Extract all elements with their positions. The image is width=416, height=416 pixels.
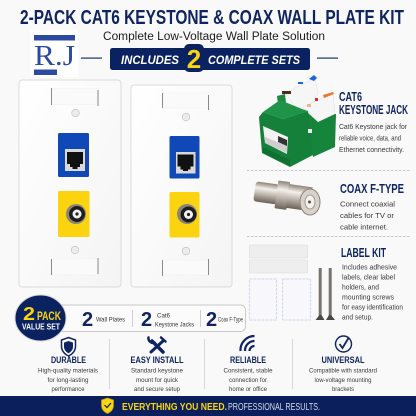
text: cat6 keystone jack: Ethernet connectivity. bbox=[339, 145, 404, 154]
text: coax f-type bbox=[340, 182, 404, 232]
feature: durable bbox=[38, 338, 99, 393]
yellow coax port bbox=[58, 191, 90, 237]
icon: wrench and screwdriver bbox=[148, 338, 166, 352]
footer band: EVERYTHING YOU NEED. bbox=[122, 401, 227, 413]
text: label kit: for easy identification bbox=[342, 302, 403, 312]
text: label kit: labels, clear label bbox=[342, 272, 395, 282]
yellow coax port bbox=[170, 192, 200, 238]
icon: signal arcs bbox=[240, 336, 254, 351]
value set strip: Cat6 bbox=[157, 312, 170, 320]
wall plate 1 bbox=[19, 80, 121, 287]
text: cat6 keystone jack: Cat6 Keystone jack for bbox=[339, 122, 407, 131]
feature: easy install: EASY INSTALL bbox=[130, 355, 184, 366]
text: cat6 keystone jack bbox=[339, 90, 408, 154]
feature: durable: for long-lasting bbox=[48, 377, 89, 384]
value set strip: Coax F-Type bbox=[218, 318, 243, 324]
icon: label kit parts bbox=[250, 245, 335, 320]
logo bbox=[30, 30, 78, 77]
text: label kit: Includes adhesive bbox=[342, 262, 397, 272]
banner: includes 2 complete sets: 2 bbox=[187, 44, 201, 74]
subtitle: Complete Low-Voltage Wall Plate Solution bbox=[103, 31, 325, 43]
value set strip: 2 bbox=[141, 309, 152, 331]
badge: 2 pack value set: PACK bbox=[37, 309, 61, 323]
feature: reliable: home or office bbox=[229, 386, 267, 393]
value set strip: Wall Plates bbox=[96, 316, 126, 324]
text: coax f-type: Connect coaxial bbox=[340, 200, 395, 208]
text: label kit bbox=[341, 246, 403, 322]
banner: includes 2 complete sets bbox=[81, 44, 338, 74]
blue cat6 port bbox=[58, 133, 89, 177]
logo: R.J bbox=[34, 41, 75, 72]
feature: reliable: Consistent, stable bbox=[224, 368, 273, 374]
badge: 2 pack value set: 2 bbox=[23, 304, 35, 324]
icon: green keystone jack bbox=[259, 75, 336, 167]
text: cat6 keystone jack: CAT6 bbox=[339, 90, 362, 104]
feature: easy install: mount for quick bbox=[136, 377, 179, 384]
feature: easy install bbox=[130, 338, 184, 393]
icon: shield bbox=[62, 338, 76, 356]
text: coax f-type: cable internet. bbox=[340, 222, 388, 232]
wall plate 2 bbox=[131, 85, 232, 287]
feature: durable: DURABLE bbox=[51, 355, 86, 366]
feature: reliable bbox=[224, 336, 273, 393]
blue cat6 port bbox=[170, 136, 200, 178]
icon: check circle bbox=[336, 336, 352, 352]
footer band bbox=[0, 396, 416, 416]
value set strip: 2 bbox=[206, 309, 217, 331]
icon: gold shield bbox=[102, 398, 114, 414]
text: label kit: holders, and bbox=[342, 282, 379, 292]
feature: universal: UNIVERSAL bbox=[322, 355, 365, 366]
value set strip bbox=[15, 295, 246, 341]
footer band: PROFESSIONAL RESULTS. bbox=[228, 401, 320, 413]
text: coax f-type: cables for TV or bbox=[340, 211, 394, 220]
feature: durable: performance bbox=[52, 386, 85, 393]
feature: durable: High-quality materials bbox=[38, 368, 99, 374]
text: label kit: LABEL KIT bbox=[341, 246, 386, 260]
feature: universal bbox=[309, 336, 377, 393]
feature: universal: low-voltage mounting bbox=[314, 377, 372, 384]
text: label kit: and setup. bbox=[342, 312, 373, 322]
banner: includes 2 complete sets: COMPLETE SETS bbox=[208, 53, 300, 67]
feature: easy install: and secure setup bbox=[134, 386, 180, 393]
feature: easy install: Standard keystone bbox=[131, 368, 183, 374]
banner: includes 2 complete sets: INCLUDES bbox=[121, 53, 179, 67]
feature: universal: brackets bbox=[332, 386, 355, 393]
value set strip: Keystone Jacks bbox=[155, 322, 194, 328]
feature: reliable: connection for bbox=[229, 377, 268, 384]
badge: 2 pack value set bbox=[15, 295, 66, 341]
value set strip: 2 bbox=[82, 309, 93, 331]
feature: universal: Compatible with standard bbox=[309, 368, 377, 374]
feature: reliable: RELIABLE bbox=[230, 355, 266, 366]
badge: 2 pack value set: VALUE SET bbox=[22, 322, 60, 332]
icon: coax f-type coupler bbox=[253, 177, 320, 215]
text: label kit: mounting screws bbox=[342, 292, 394, 302]
